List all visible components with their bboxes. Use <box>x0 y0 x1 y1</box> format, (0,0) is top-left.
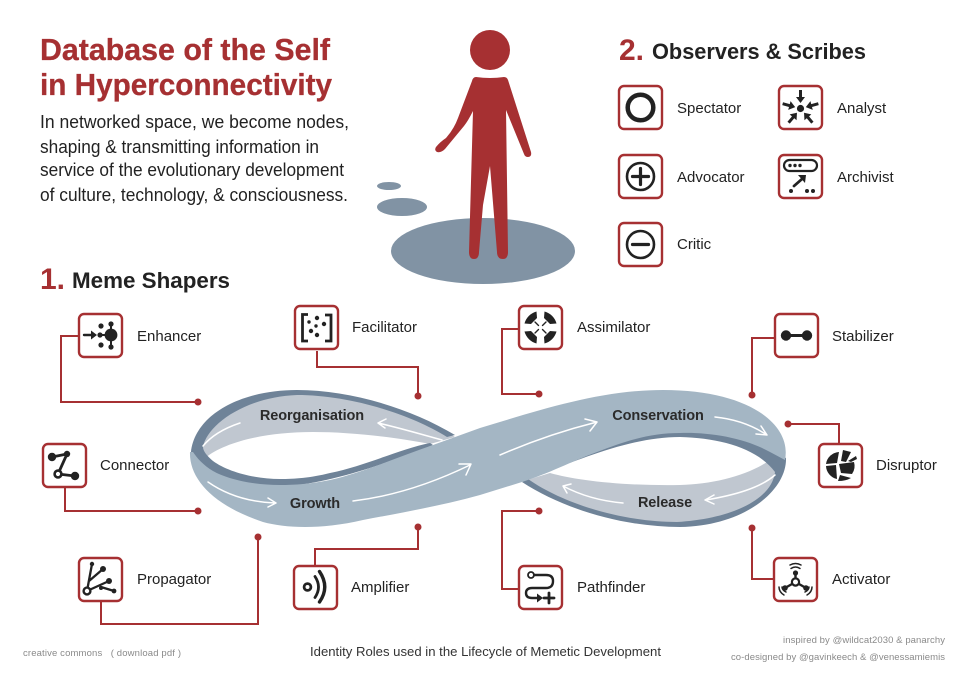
connector lines with end dots <box>61 329 839 624</box>
band: front blue <box>190 390 786 527</box>
role: spectator <box>619 86 741 129</box>
band labels: Conservation <box>612 408 704 424</box>
band: back upper left <box>200 394 455 458</box>
heading: observers and scribes: 2. <box>619 34 644 67</box>
role: enhancer: Enhancer <box>137 328 201 345</box>
band labels: Reorganisation <box>260 408 364 424</box>
role: disruptor <box>819 444 937 487</box>
role: assimilator <box>519 306 650 349</box>
heading: meme shapers: Meme Shapers <box>72 268 230 293</box>
band labels: Growth <box>290 496 340 512</box>
role: propagator <box>79 558 211 601</box>
role: disruptor: Disruptor <box>876 457 937 474</box>
intro text block: In networked space, we become nodes, <box>40 112 349 132</box>
role: stabilizer: Stabilizer <box>832 328 894 345</box>
role: stabilizer <box>775 314 894 357</box>
role: activator <box>774 558 890 601</box>
band: back lower right <box>527 458 780 523</box>
title: in Hyperconnectivity <box>40 68 332 102</box>
role: pathfinder <box>519 566 645 609</box>
intro text block: of culture, technology, & consciousness. <box>40 185 348 205</box>
footer: caption: Identity Roles used in the Lifecycle of Memetic Development <box>310 645 662 659</box>
footer: credits right: inspired by @wildcat2030 & panarchy <box>783 635 945 646</box>
person figure on ellipses <box>377 30 575 284</box>
role: propagator: Propagator <box>137 571 211 588</box>
role: connector <box>43 444 169 487</box>
role: facilitator <box>295 306 417 349</box>
role: spectator: Spectator <box>677 100 741 117</box>
role: enhancer <box>79 314 201 357</box>
role: facilitator: Facilitator <box>352 319 417 336</box>
heading: observers and scribes: Observers & Scribes <box>652 39 866 64</box>
role: critic <box>619 223 712 266</box>
title: Database of the Self <box>40 33 331 67</box>
infinity loop diagram <box>190 390 786 527</box>
title <box>40 33 332 102</box>
role: analyst: Analyst <box>837 100 887 117</box>
band labels: Release <box>638 495 692 511</box>
intro text block: shaping & transmitting information in <box>40 137 319 157</box>
role: critic: Critic <box>677 236 712 253</box>
heading: meme shapers <box>40 263 230 296</box>
footer: credits left: creative commons ( download pdf ) <box>23 648 181 659</box>
footer: credits right: co-designed by @gavinkeech & @venessamiemis <box>731 652 945 663</box>
band edge: dark left <box>191 390 455 487</box>
heading: observers and scribes <box>619 34 866 67</box>
role: amplifier: Amplifier <box>351 579 409 596</box>
role: advocator <box>619 155 745 198</box>
band edge: dark right <box>522 430 786 527</box>
band labels <box>260 408 704 512</box>
role: connector: Connector <box>100 457 169 474</box>
role: advocator: Advocator <box>677 169 745 186</box>
role: archivist <box>779 155 895 198</box>
role: analyst <box>779 86 887 129</box>
footer: credits right <box>731 635 945 663</box>
role: amplifier <box>294 566 409 609</box>
intro text block: service of the evolutionary development <box>40 160 344 180</box>
heading: meme shapers: 1. <box>40 263 65 296</box>
flow arrows <box>203 417 775 507</box>
role: pathfinder: Pathfinder <box>577 579 645 596</box>
role: assimilator: Assimilator <box>577 319 650 336</box>
role: archivist: Archivist <box>837 169 895 186</box>
intro text block <box>40 112 349 205</box>
role: activator: Activator <box>832 571 890 588</box>
